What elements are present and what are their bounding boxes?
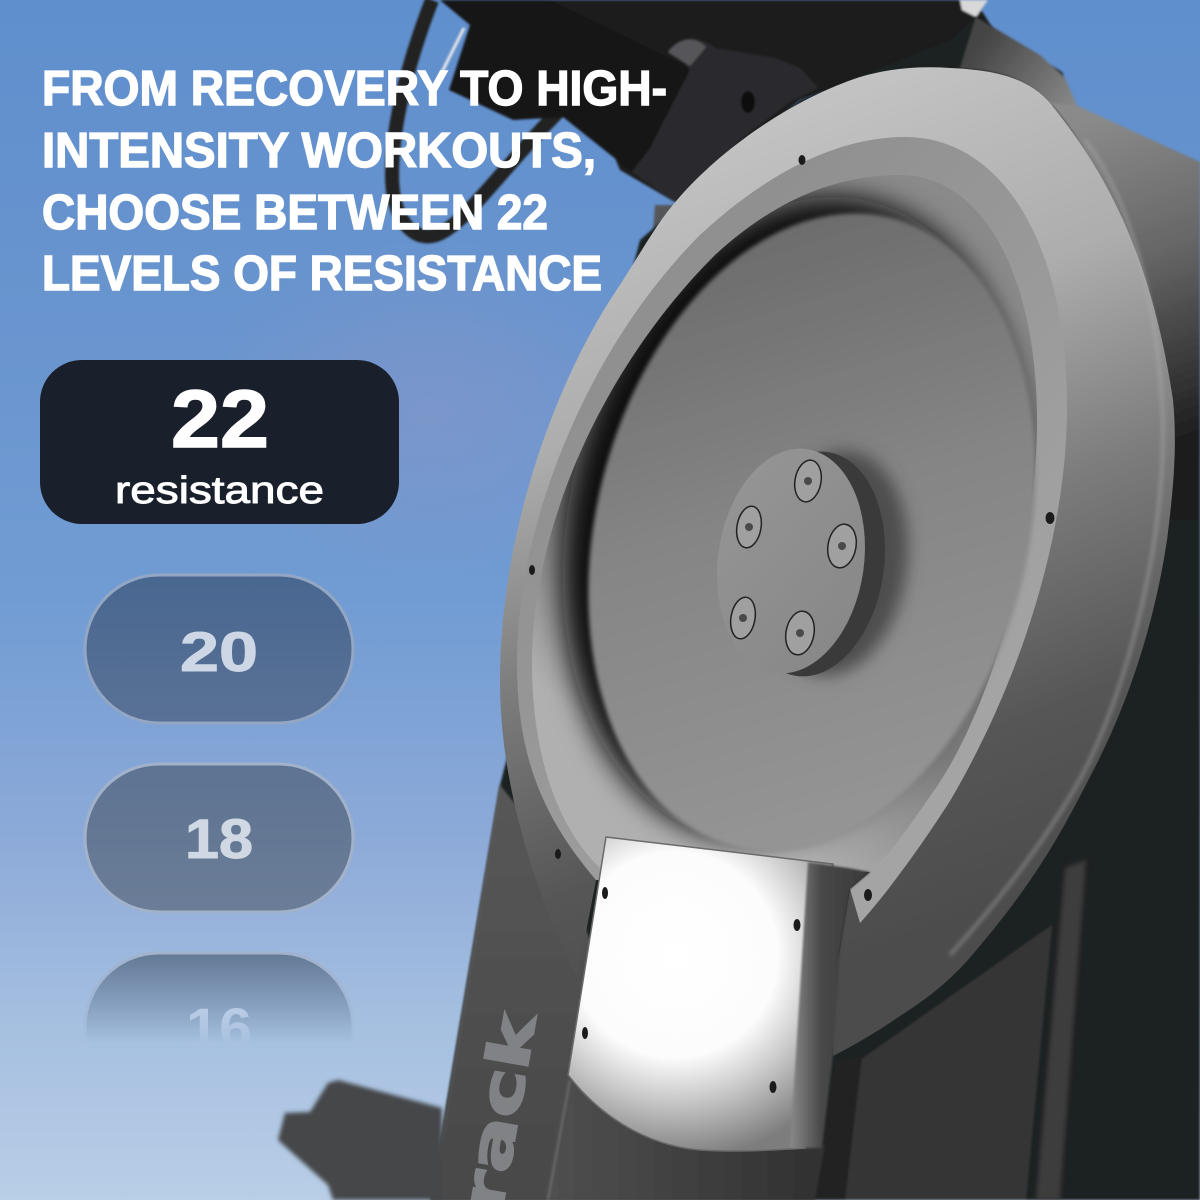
screws: [529, 155, 1054, 1093]
title: FROM RECOVERY TO HIGH-: [42, 62, 667, 116]
level pill: 20: [85, 575, 353, 723]
title: [42, 62, 667, 301]
title: INTENSITY WORKOUTS,: [42, 124, 596, 178]
machine front column: [432, 785, 825, 1200]
title: LEVELS OF RESISTANCE: [42, 247, 602, 301]
title: CHOOSE BETWEEN 22: [42, 186, 548, 240]
icon: console handle bar: [392, 0, 1060, 236]
level pill: 18: 18: [185, 807, 253, 870]
active level pill: 22 resistance: resistance: [115, 470, 324, 512]
level pill: 18: [85, 764, 353, 912]
shell rim highlight: [950, 140, 1163, 955]
flywheel inner recess: [532, 175, 1037, 872]
machine rear housing: [430, 17, 1200, 1200]
flywheel outer shell face: [500, 67, 1175, 1056]
plate side channel: [790, 862, 870, 1148]
recess shadow crescent: [542, 179, 1037, 857]
flywheel light band: [517, 137, 1067, 923]
active level pill: 22 resistance: [40, 360, 399, 524]
active level pill: 22 resistance: 22: [171, 374, 269, 465]
level pill: 20: 20: [180, 620, 258, 683]
level pill: 16 fading out: [86, 952, 352, 1034]
flywheel disc: [524, 165, 1100, 899]
bottle tray: [278, 1080, 442, 1200]
machine illustration: [278, 0, 1200, 1200]
level pill: 16 fading out: 16: [186, 996, 252, 1059]
chrome plate: [568, 837, 833, 1151]
centre hub with five bolts: [703, 439, 922, 686]
